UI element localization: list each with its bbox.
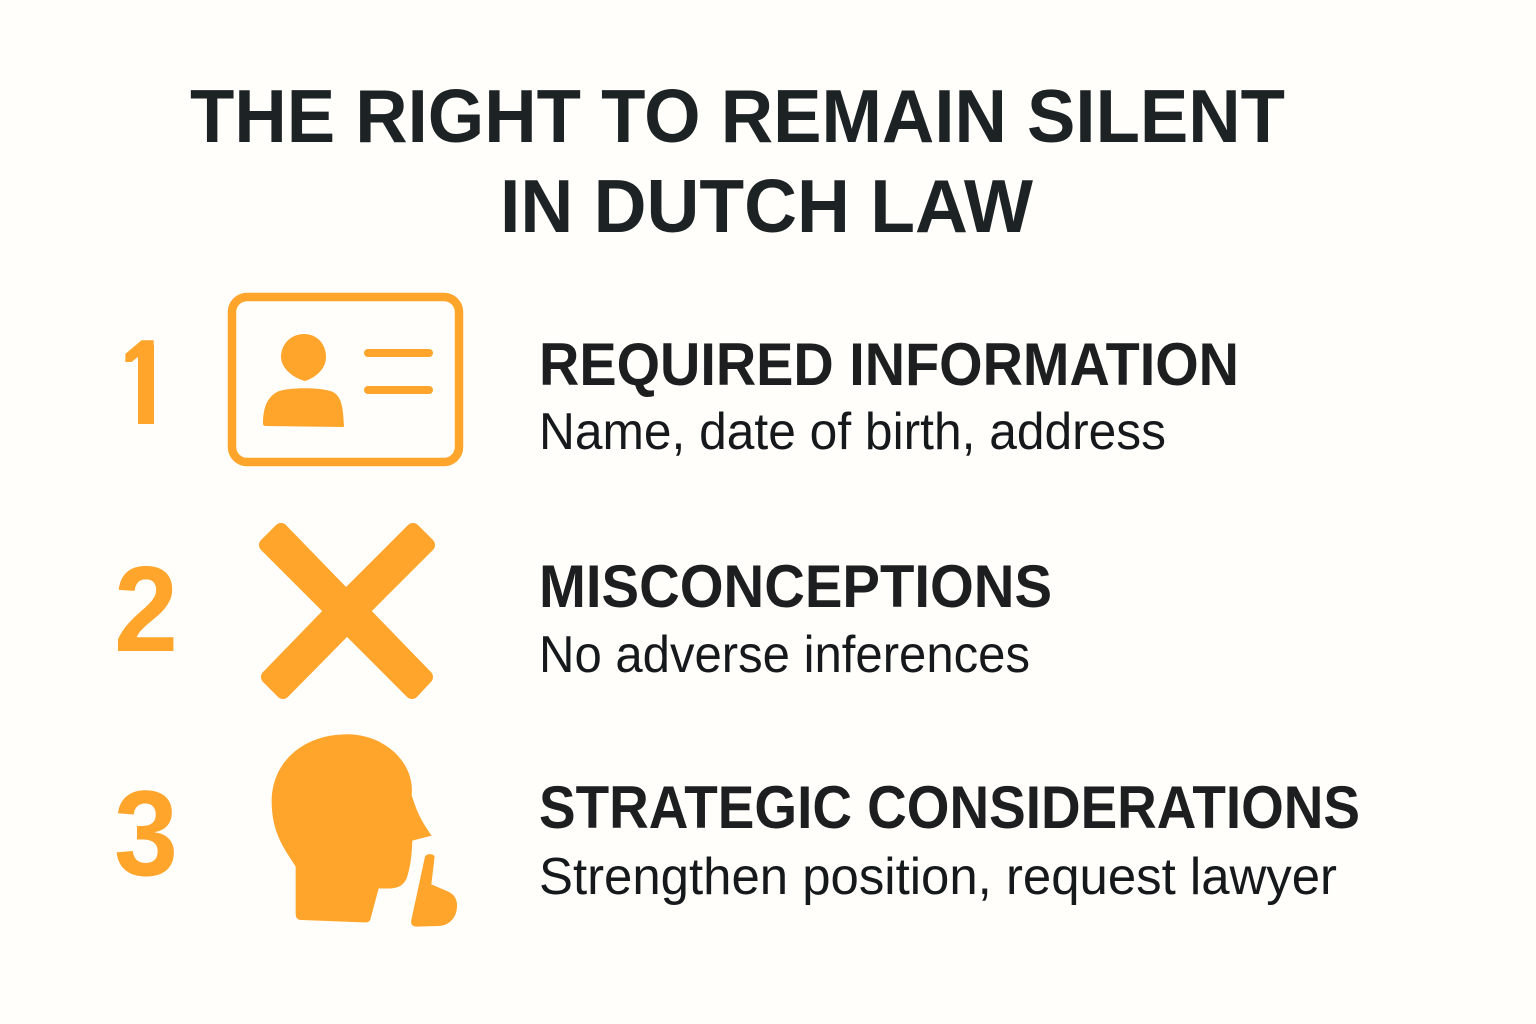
icon: head with finger on lips: [272, 734, 457, 927]
title: [190, 74, 1285, 248]
title: THE RIGHT TO REMAIN SILENT: [190, 74, 1285, 158]
number 3: 3: [114, 765, 178, 901]
panel: strategic considerations: [114, 734, 1360, 927]
panel: misconceptions: [114, 530, 1052, 692]
number 1: 1: [119, 314, 171, 450]
number 1: [125, 340, 154, 424]
title: IN DUTCH LAW: [500, 164, 1033, 248]
icon: ID card: [232, 297, 459, 462]
text: required information detail: Name, date of birth, address: [539, 403, 1166, 461]
icon: cross: [266, 530, 428, 692]
heading: strategic considerations: STRATEGIC CONSIDERATIONS: [539, 774, 1360, 841]
heading: required information: REQUIRED INFORMATION: [539, 331, 1239, 398]
heading: misconceptions: MISCONCEPTIONS: [539, 553, 1052, 620]
infographic: [116, 89, 1358, 927]
text: strategic considerations detail: Strengthen position, request lawyer: [539, 848, 1337, 906]
number 2: 2: [114, 541, 178, 677]
panel: required information: [119, 297, 1239, 462]
text: misconceptions detail: No adverse inferences: [539, 626, 1030, 684]
